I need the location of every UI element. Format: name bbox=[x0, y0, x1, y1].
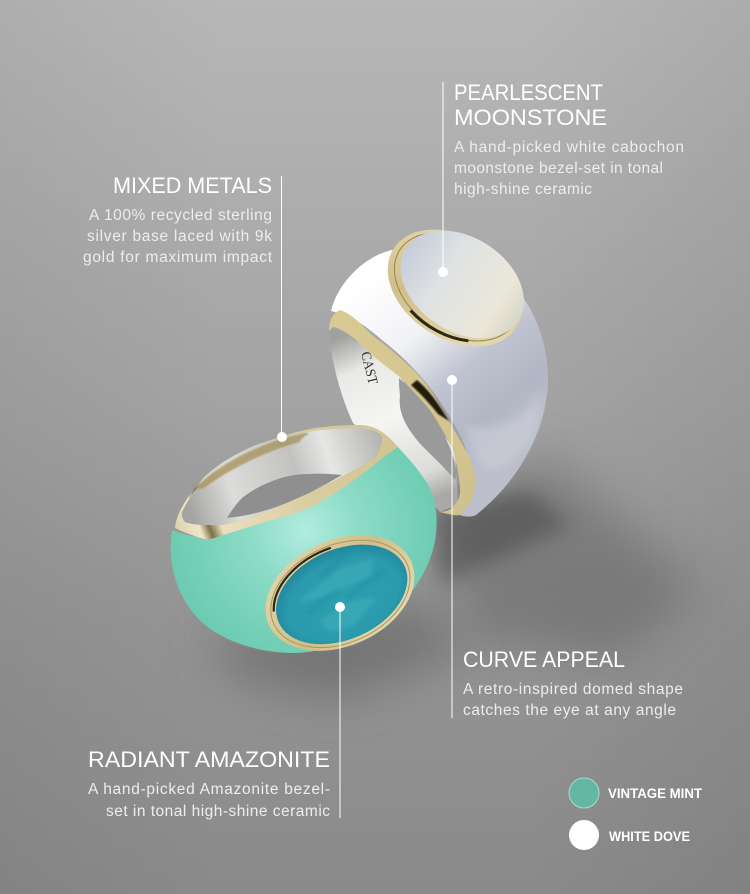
callout: pearlescent moonstone bbox=[438, 80, 684, 277]
cast shadows bbox=[200, 455, 700, 700]
callout: radiant amazonite: A hand-picked Amazonite bezel- bbox=[88, 781, 330, 798]
ring body bbox=[171, 447, 437, 653]
callout: curve appeal: catches the eye at any angle bbox=[463, 702, 676, 719]
moonstone bbox=[380, 208, 544, 360]
callout: mixed metals: gold for maximum impact bbox=[83, 249, 273, 266]
callout: mixed metals: silver base laced with 9k bbox=[87, 228, 272, 245]
callout: mixed metals bbox=[83, 173, 287, 442]
inner gold lining bbox=[194, 433, 308, 490]
callout: radiant amazonite: set in tonal high-shine ceramic bbox=[106, 803, 330, 820]
ring interior silver bbox=[329, 327, 458, 512]
engraved mark: CAST bbox=[357, 350, 380, 386]
callout: curve appeal: A retro-inspired domed shape bbox=[463, 681, 683, 698]
legend: colours bbox=[569, 778, 703, 850]
see-through opening bbox=[399, 378, 456, 480]
callout: pearlescent moonstone: high-shine ceramic bbox=[454, 181, 592, 198]
swatch: vintage mint: VINTAGE MINT bbox=[608, 786, 703, 801]
callout: mixed metals: MIXED METALS bbox=[113, 173, 272, 198]
swatch: white dove: WHITE DOVE bbox=[609, 829, 690, 844]
callout: mixed metals: A 100% recycled sterling bbox=[89, 207, 272, 224]
gold band bbox=[175, 425, 398, 540]
callout: pearlescent moonstone: MOONSTONE bbox=[454, 105, 607, 130]
callout: curve appeal bbox=[447, 375, 683, 719]
callout: radiant amazonite bbox=[88, 602, 345, 820]
vintage mint ring bbox=[171, 425, 437, 673]
callout: pearlescent moonstone: moonstone bezel-set in tonal bbox=[454, 160, 663, 177]
moonstone bezel bbox=[366, 203, 546, 371]
amazonite stone bbox=[260, 525, 423, 664]
see-through opening bbox=[227, 474, 342, 518]
callout: pearlescent moonstone: A hand-picked white cabochon bbox=[454, 139, 684, 156]
callout: curve appeal: CURVE APPEAL bbox=[463, 647, 625, 672]
callout: radiant amazonite: RADIANT AMAZONITE bbox=[88, 747, 330, 772]
amazonite bezel bbox=[247, 513, 433, 673]
ring interior silver bbox=[182, 428, 383, 525]
ring body bbox=[331, 250, 548, 517]
gold band bbox=[329, 310, 475, 515]
white dove ring bbox=[329, 203, 548, 517]
body gloss bbox=[465, 392, 540, 470]
callout: pearlescent moonstone: PEARLESCENT bbox=[454, 80, 603, 105]
